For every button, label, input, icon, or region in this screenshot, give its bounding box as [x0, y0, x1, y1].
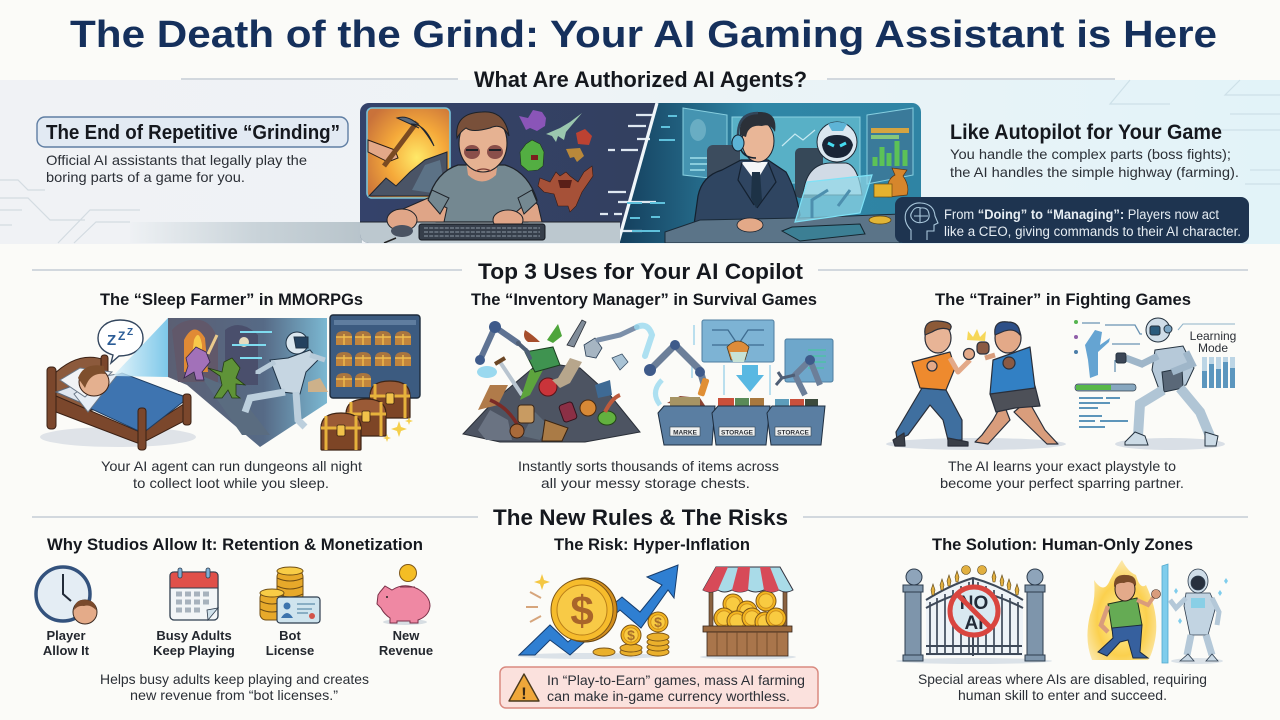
- text: sleep farmer description: [101, 458, 362, 491]
- desk left: [360, 222, 620, 243]
- panel: what are authorized AI agents: [0, 67, 1280, 244]
- section heading: top 3 uses: Top 3 Uses for Your AI Copilot: [478, 259, 804, 284]
- illustration: dungeon scene: [168, 318, 328, 447]
- icon: coin stacks: $: [654, 614, 662, 630]
- icon: no AI sign: NO: [960, 593, 988, 614]
- illustration: learning UI: [1074, 320, 1142, 427]
- text: why studios description: new revenue from “bot licenses.”: [130, 687, 338, 703]
- icon: calendar: [170, 568, 218, 620]
- icon: impact burst: [967, 329, 986, 341]
- text: you handle the complex parts: You handle the complex parts (boss fights);: [950, 146, 1231, 162]
- character: blue shirt fighter: [975, 322, 1058, 444]
- subheading: why studios allow it: Why Studios Allow It: Retention & Monetization: [47, 535, 423, 554]
- chart: learning bars: [1202, 357, 1235, 388]
- text: trainer description: [940, 458, 1184, 491]
- diagonal divider: [618, 103, 657, 243]
- icon: no AI sign: [950, 587, 998, 635]
- icon: rising arrow: [518, 565, 678, 659]
- illustration: locked gate: [896, 566, 1052, 664]
- label: busy adults keep playing: Busy Adults: [156, 628, 232, 643]
- text: inventory manager description: Instantly sorts thousands of items across: [518, 458, 779, 474]
- character: robot co-worker: [795, 122, 862, 198]
- text: learning mode: Learning: [1190, 329, 1236, 343]
- illustration: fighting robot: [1115, 318, 1225, 450]
- text: trainer description: become your perfect sparring partner.: [940, 475, 1184, 491]
- label: busy adults keep playing: Keep Playing: [153, 643, 235, 658]
- label: player allow it: [43, 628, 90, 658]
- character: tired player: [384, 112, 542, 243]
- icon: coin stacks: [593, 612, 669, 656]
- illustration: storage bins: [658, 396, 825, 445]
- character: CEO in suit with headset: [693, 112, 800, 232]
- panel: human-only zones: [896, 535, 1228, 703]
- callout: from doing to managing: From “Doing” to “Managing”: Players now act: [944, 207, 1219, 222]
- text: learning mode: [1178, 324, 1236, 355]
- label: bot license: Bot: [279, 628, 301, 643]
- callout: from doing to managing: like a CEO, giving commands to their AI character.: [944, 224, 1241, 239]
- text: solution description: human skill to enter and succeed.: [958, 687, 1167, 703]
- illustration: tired player versus CEO with robot: [360, 103, 921, 243]
- icon: warning triangle: [509, 674, 539, 703]
- illustration: storage bins: STORACE: [777, 430, 809, 436]
- label: bot license: [266, 628, 314, 658]
- illustration: storage bins: STORAGE: [721, 430, 754, 436]
- illustration: barrier wall: [1162, 564, 1168, 663]
- character: disabled robot: [1170, 569, 1228, 664]
- icon: no AI sign: AI: [964, 613, 984, 634]
- text: learning mode: Mode: [1198, 341, 1228, 355]
- monitors: [683, 108, 913, 184]
- subheading: trainer: The “Trainer” in Fighting Games: [935, 290, 1191, 309]
- callout: the end of repetitive grinding: The End of Repetitive “Grinding”: [46, 122, 340, 144]
- icon: clock with tired face: [36, 567, 97, 624]
- text: trainer description: The AI learns your exact playstyle to: [948, 458, 1176, 474]
- icon: zzz speech bubble: [98, 320, 143, 363]
- panel: why studios allow it: [36, 535, 433, 703]
- panel: hyper-inflation risk: [500, 535, 818, 708]
- text: official AI assistants: Official AI assistants that legally play the: [46, 152, 307, 168]
- icon: piggy bank: [377, 564, 430, 625]
- label: player allow it: Allow It: [43, 643, 90, 658]
- desk right: [665, 214, 900, 243]
- label: player allow it: Player: [46, 628, 86, 643]
- icon: large dollar coin: $: [570, 587, 594, 634]
- text: official AI assistants: boring parts of a game for you.: [46, 169, 245, 185]
- icon: zzz speech bubble: Z: [118, 329, 125, 343]
- icon: coin stacks: $: [627, 627, 635, 643]
- illustration: two human fighters: [886, 321, 1066, 450]
- panel: loot inventory window: [330, 315, 420, 398]
- icon: large dollar coin: [526, 574, 617, 642]
- icon: warning triangle: !: [521, 684, 527, 703]
- text: inventory manager description: all your messy storage chests.: [541, 475, 750, 491]
- icon: monsters: [519, 110, 593, 212]
- icon: left robot arms: [475, 321, 652, 378]
- subheading: sleep farmer: The “Sleep Farmer” in MMORPGs: [100, 290, 363, 309]
- title: The Death of the Grind: Your AI Gaming Assistant is Here: [70, 14, 1217, 56]
- text: why studios description: Helps busy adults keep playing and creates: [100, 671, 369, 687]
- holographic screen: [795, 175, 872, 222]
- icon: market stall: [700, 567, 796, 660]
- character: human with flame aura: [1087, 560, 1160, 660]
- text: sleep farmer description: Your AI agent can run dungeons all night: [101, 458, 362, 474]
- label: new revenue: New: [393, 628, 420, 643]
- callout: play-to-earn warning: In “Play-to-Earn” games, mass AI farming: [547, 672, 805, 688]
- icon: pickaxe mining panel: [367, 108, 450, 198]
- callout: the end of repetitive grinding: [37, 117, 348, 147]
- label: new revenue: [379, 628, 433, 658]
- text: inventory manager description: [518, 458, 779, 491]
- callout: play-to-earn warning: can make in-game currency worthless.: [547, 688, 790, 704]
- illustration: sleeping player in bed: [40, 355, 196, 450]
- character: running robot: [232, 332, 325, 427]
- character: orange shirt fighter: [893, 321, 974, 446]
- panel: inventory manager: [463, 290, 833, 491]
- label: busy adults keep playing: [153, 628, 235, 658]
- label: bot license: License: [266, 643, 314, 658]
- section heading: new rules and risks: The New Rules & The Risks: [493, 505, 788, 530]
- subheading: inventory manager: The “Inventory Manager” in Survival Games: [471, 290, 817, 309]
- subheading: hyper-inflation: The Risk: Hyper-Inflation: [554, 535, 750, 554]
- illustration: storage bins: MARKE: [673, 430, 698, 436]
- text: you handle the complex parts: [950, 146, 1239, 180]
- keyboard: [419, 224, 545, 240]
- callout: from doing to managing: [895, 197, 1249, 243]
- panel: trainer: [886, 290, 1236, 491]
- icon: treasure chests: [321, 381, 413, 450]
- text: solution description: [918, 671, 1207, 703]
- illustration: sorting arm and holo screens: [644, 320, 833, 405]
- speed lines: [600, 115, 656, 231]
- illustration: projection beam: [113, 318, 168, 377]
- character: green goblin: [208, 358, 245, 398]
- subheading: solution: The Solution: Human-Only Zones: [932, 535, 1193, 554]
- panel: sleep farmer: [40, 290, 420, 491]
- icon: money bag and coins: [874, 168, 908, 197]
- icon: coin stacks and bot license: [260, 567, 320, 623]
- character: purple imp: [184, 347, 210, 380]
- text: you handle the complex parts: the AI handles the simple highway (farming).: [950, 164, 1239, 180]
- text: official AI assistants: [46, 152, 307, 185]
- text: why studios description: [100, 671, 369, 703]
- section heading: what are authorized AI agents: What Are Authorized AI Agents?: [474, 67, 807, 92]
- heading: like autopilot: Like Autopilot for Your Game: [950, 121, 1222, 144]
- text: solution description: Special areas where AIs are disabled, requiring: [918, 671, 1207, 687]
- text: sleep farmer description: to collect loot while you sleep.: [133, 475, 329, 491]
- label: new revenue: Revenue: [379, 643, 433, 658]
- icon: brain in head: [905, 203, 938, 240]
- callout: play-to-earn warning: [500, 667, 818, 708]
- tablet: [782, 224, 865, 241]
- icon: zzz speech bubble: Z: [107, 332, 116, 349]
- icon: flying items: [524, 320, 628, 370]
- illustration: messy item pile: [463, 347, 640, 442]
- icon: zzz speech bubble: Z: [127, 327, 133, 338]
- hand on mouse: [737, 218, 763, 232]
